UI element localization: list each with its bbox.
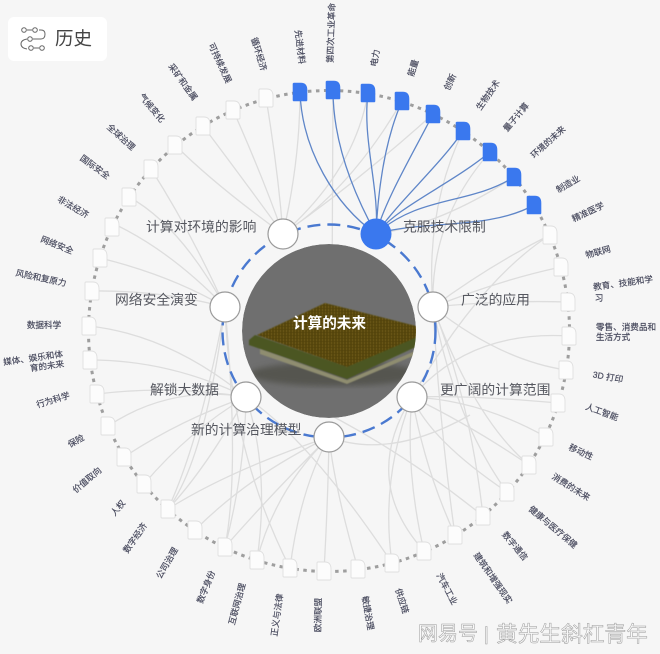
topic labels: 物联网 xyxy=(584,243,612,260)
topic nodes: blue xyxy=(293,81,541,214)
dashed inner ring xyxy=(222,224,436,438)
title card xyxy=(8,17,107,61)
watermark: 黄先生斜杠青年 xyxy=(496,622,648,646)
topic nodes: white xyxy=(82,89,576,580)
central image: processor chip xyxy=(242,244,420,418)
topic labels: 公司治理 xyxy=(153,545,180,580)
topic labels: 循环经济 xyxy=(249,36,270,72)
topic labels: 育的未来 xyxy=(29,358,65,373)
topic labels: 互联网治理 xyxy=(226,581,247,626)
hub circles xyxy=(210,218,448,452)
topic labels: 数据科学 xyxy=(27,319,62,330)
topic labels: 消费的未来 xyxy=(550,471,593,503)
topic labels: 能量 xyxy=(405,58,421,78)
topic labels: 教育、技能和学 xyxy=(592,273,654,292)
topic labels: 行为科学 xyxy=(35,389,71,410)
topic labels: 数字身份 xyxy=(194,568,217,605)
hub labels: 计算对环境的影响 xyxy=(146,220,256,234)
topic labels: 生物技术 xyxy=(473,77,502,112)
watermark: | xyxy=(484,624,489,644)
topic labels: 气候变化 xyxy=(137,91,168,125)
topic labels: 欧洲联盟 xyxy=(312,597,323,632)
hub labels: 广泛的应用 xyxy=(461,292,530,308)
topic labels: 零售、消费品和 xyxy=(596,321,656,332)
topic labels: 正义与法律 xyxy=(268,592,285,637)
topic labels: 创新 xyxy=(441,71,458,92)
topic labels: 敏捷治理 xyxy=(360,595,377,631)
page heading: 历史 xyxy=(55,28,92,49)
hub labels: 克服技术限制 xyxy=(403,220,486,234)
topic labels: 第四次工业革命 xyxy=(324,2,337,63)
topic labels: 风险和复原力 xyxy=(15,267,67,288)
topic labels: 制造业 xyxy=(554,172,582,195)
topic labels: 健康与医疗保健 xyxy=(527,503,580,550)
topic labels: 移动性 xyxy=(567,441,596,462)
topic labels: 汽车工业 xyxy=(435,571,461,607)
topic labels: 网络安全 xyxy=(39,233,76,256)
topic labels: 先进材料 xyxy=(293,29,308,65)
central title: 计算的未来 xyxy=(293,314,366,332)
topic labels: 可持续发展 xyxy=(206,41,235,85)
topic labels: 采矿和金属 xyxy=(166,61,200,102)
hub labels: 更广阔的计算范围 xyxy=(440,382,550,398)
topic labels: 供应链 xyxy=(393,587,412,615)
topic labels: 精准医学 xyxy=(570,199,606,224)
topic labels: 国际安全 xyxy=(78,152,113,181)
topic labels: 数字通信 xyxy=(500,529,531,563)
icon: history path xyxy=(21,28,45,50)
topic labels: 价值取向 xyxy=(70,464,103,495)
topic labels: 保险 xyxy=(66,431,86,449)
topic labels: 量子计算 xyxy=(500,100,531,133)
topic labels: 媒体、娱乐和体 xyxy=(2,348,64,367)
topic labels: 习 xyxy=(595,293,603,303)
topic labels: 环境的未来 xyxy=(528,123,568,160)
topic labels: 3D 打印 xyxy=(592,368,624,385)
topic labels: 全球治理 xyxy=(105,121,138,152)
hub labels: 新的计算治理模型 xyxy=(191,422,302,438)
topic labels: 数字经济 xyxy=(120,520,149,555)
gray links between topics and hubs xyxy=(89,90,569,571)
hub labels: 解锁大数据 xyxy=(150,382,219,398)
topic labels: 建筑和增强现实 xyxy=(472,550,515,606)
blue links to the active hub xyxy=(300,90,534,234)
topic labels: 生活方式 xyxy=(596,331,631,342)
hub labels: 网络安全演变 xyxy=(115,292,198,308)
dotted outer ring xyxy=(88,90,570,572)
topic labels: 非法经济 xyxy=(56,193,91,220)
topic labels: 电力 xyxy=(368,48,381,67)
watermark: 网易号 xyxy=(418,623,478,645)
watermark xyxy=(418,622,648,646)
topic labels: 人工智能 xyxy=(584,400,621,423)
topic labels: 人权 xyxy=(108,497,128,518)
hub labels xyxy=(115,220,550,438)
